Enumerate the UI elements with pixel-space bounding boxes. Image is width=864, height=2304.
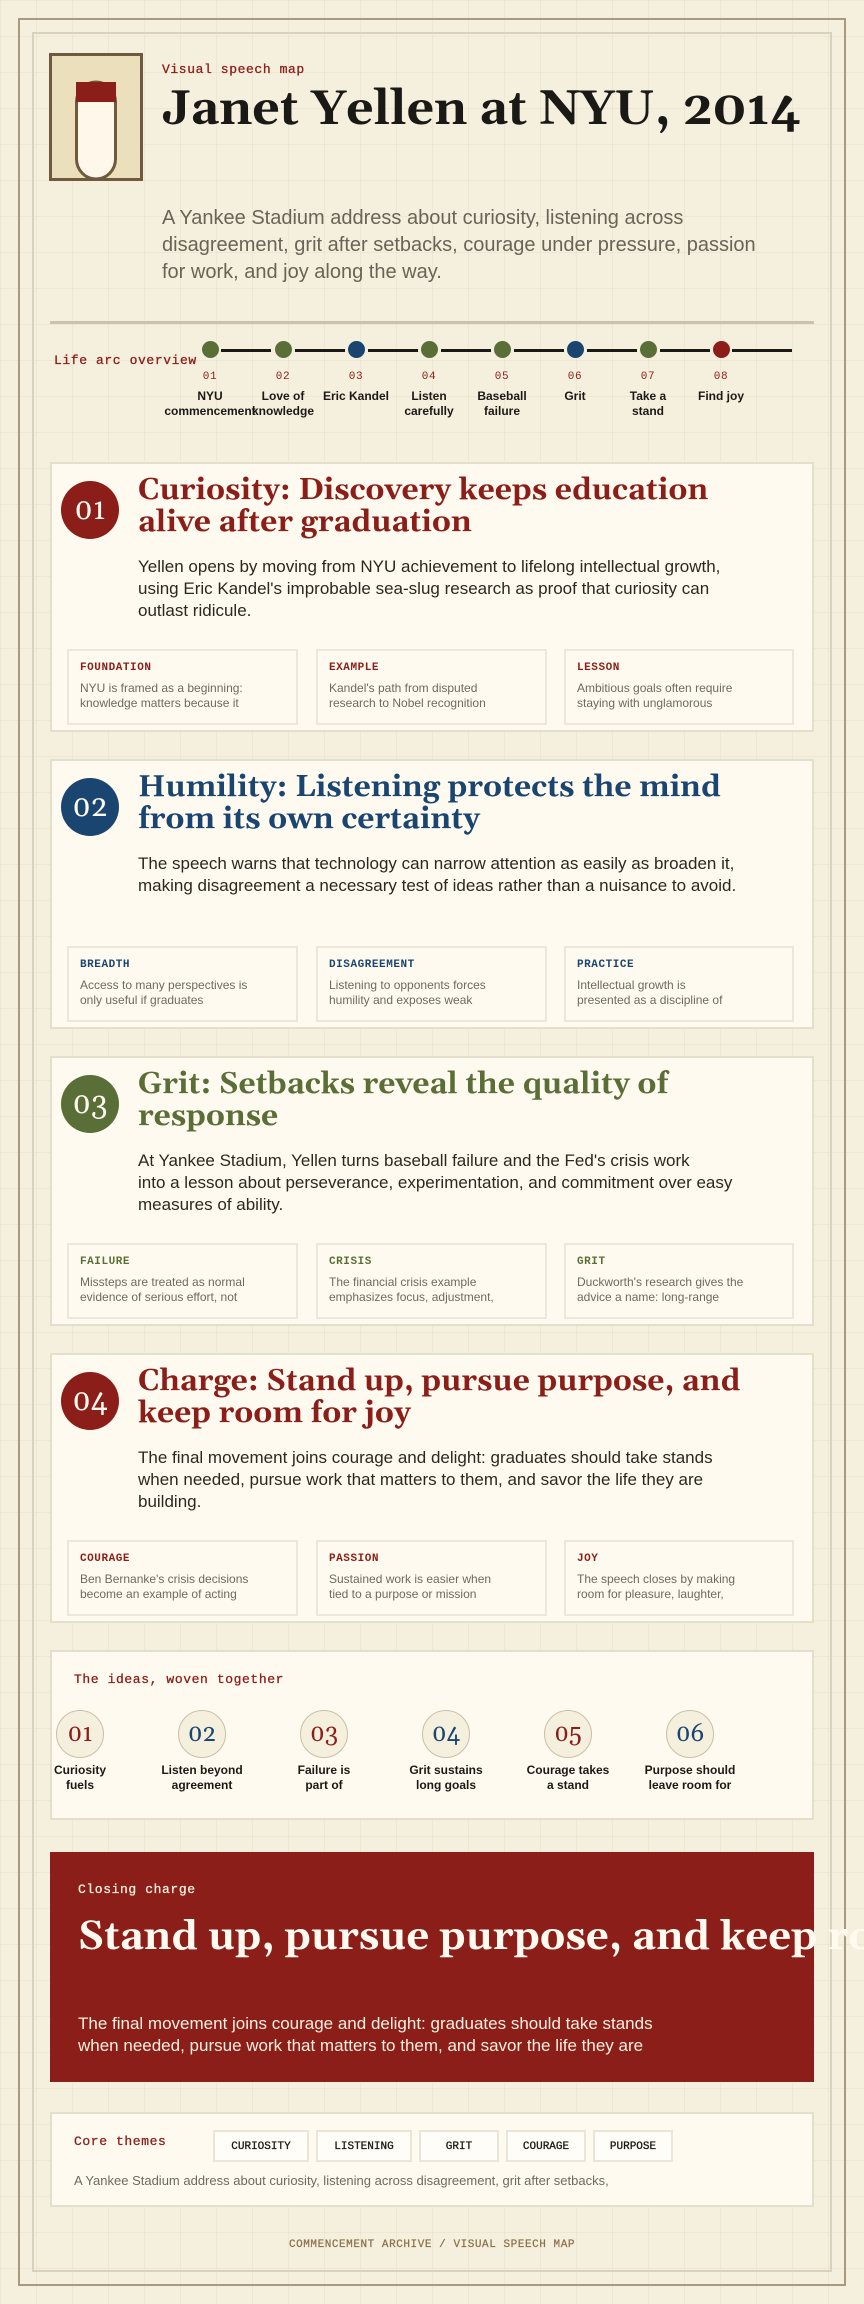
heading: Humility: Listening protects the mind: [138, 769, 721, 807]
card: passion: tied to a purpose or mission: [329, 1587, 476, 1601]
milestone 02: 02: [276, 371, 290, 383]
panel: curiosity: [50, 462, 814, 732]
subtitle: disagreement, grit after setbacks, courage under pressure, passion: [162, 234, 756, 256]
core themes label: Core themes: [74, 2134, 166, 2149]
idea 05: 05: [554, 1720, 582, 1750]
card: joy: [564, 1540, 794, 1616]
card: failure: Missteps are treated as normal: [80, 1275, 245, 1289]
card: passion: PASSION: [329, 1553, 379, 1565]
card: breadth: [67, 946, 298, 1022]
eyebrow: Visual speech map: [162, 62, 305, 77]
timeline label: Life arc overview: [54, 353, 197, 368]
card: lesson: Ambitious goals often require: [577, 681, 732, 695]
idea 02: agreement: [172, 1778, 232, 1792]
milestone 06: 06: [568, 371, 582, 383]
number badge 04: [61, 1372, 119, 1430]
card: disagreement: [316, 946, 547, 1022]
milestone 05: failure: [484, 404, 520, 418]
panel: charge: [50, 1353, 814, 1623]
body text: [138, 1448, 713, 1511]
milestone 08: 08: [714, 371, 728, 383]
card: disagreement: humility and exposes weak: [329, 993, 472, 1007]
card: courage: COURAGE: [80, 1553, 130, 1565]
idea 05: Courage takes: [527, 1762, 609, 1776]
card: passion: Sustained work is easier when: [329, 1572, 491, 1586]
idea 03: part of: [305, 1778, 343, 1792]
card: courage: [67, 1540, 298, 1616]
card: example: research to Nobel recognition: [329, 696, 486, 710]
subtitle: A Yankee Stadium address about curiosity, listening across: [162, 207, 683, 229]
milestone 01: 01: [203, 371, 217, 383]
heading: keep room for joy: [138, 1395, 411, 1433]
card: practice: Intellectual growth is: [577, 978, 686, 992]
chip: listening: LISTENING: [334, 2141, 394, 2153]
milestone 06: Grit: [564, 388, 586, 402]
heading: [138, 472, 708, 542]
body text: into a lesson about perseverance, experimentation, and commitment over easy: [138, 1173, 732, 1192]
milestone 07: Take a: [630, 388, 666, 402]
milestone 03: 03: [349, 371, 363, 383]
card: foundation: [67, 649, 298, 725]
chip: purpose: [593, 2130, 673, 2162]
card: lesson: LESSON: [577, 662, 620, 674]
body text: Yellen opens by moving from NYU achievement to lifelong intellectual growth,: [138, 557, 720, 576]
body text: The final movement joins courage and delight: graduates should take stands: [138, 1448, 713, 1467]
idea 04: 04: [432, 1720, 460, 1750]
milestone 04: carefully: [404, 404, 454, 418]
body text: building.: [138, 1492, 201, 1511]
card: lesson: [564, 649, 794, 725]
heading: Curiosity: Discovery keeps education: [138, 472, 708, 510]
number badge 01: 01: [74, 492, 106, 530]
milestone 02: knowledge: [252, 404, 314, 418]
idea 01: Curiosity: [54, 1762, 106, 1776]
panel: humility: [50, 759, 814, 1029]
milestone 01: NYU: [197, 388, 223, 402]
card: joy: The speech closes by making: [577, 1572, 735, 1586]
milestone 07: stand: [632, 404, 664, 418]
idea 03: [298, 1710, 350, 1792]
idea 02: 02: [188, 1720, 216, 1750]
idea 06: 06: [676, 1720, 704, 1750]
idea 03: 03: [310, 1720, 338, 1750]
milestone 01: [164, 341, 256, 418]
card: breadth: BREADTH: [80, 959, 130, 971]
idea 04: [409, 1710, 483, 1792]
milestone 07: 07: [641, 371, 655, 383]
milestone 08: Find joy: [698, 388, 744, 402]
chip: curiosity: CURIOSITY: [231, 2141, 291, 2153]
card: joy: room for pleasure, laughter,: [577, 1587, 724, 1601]
card: foundation: NYU is framed as a beginning:: [80, 681, 243, 695]
panel: grit: [50, 1056, 814, 1326]
milestone 07: [630, 341, 666, 418]
milestone 04: Listen: [411, 388, 447, 402]
closing body: The final movement joins courage and delight: graduates should take stands: [78, 2014, 653, 2033]
card: breadth: only useful if graduates: [80, 993, 203, 1007]
card: failure: FAILURE: [80, 1256, 130, 1268]
milestone 02: [252, 341, 314, 418]
idea 06: leave room for: [649, 1778, 731, 1792]
card: grit: advice a name: long-range: [577, 1290, 719, 1304]
card: crisis: CRISIS: [329, 1256, 372, 1268]
chip: grit: GRIT: [446, 2141, 472, 2153]
card: crisis: [316, 1243, 547, 1319]
card: passion: [316, 1540, 547, 1616]
heading: [138, 1066, 670, 1136]
heading: alive after graduation: [138, 504, 472, 542]
chip: courage: COURAGE: [523, 2141, 569, 2153]
idea 04: Grit sustains: [409, 1762, 483, 1776]
idea 06: [645, 1710, 735, 1792]
card: courage: Ben Bernanke's crisis decisions: [80, 1572, 248, 1586]
card: disagreement: Listening to opponents forces: [329, 978, 486, 992]
milestone 01: commencement: [164, 404, 256, 418]
number badge 03: 03: [73, 1086, 107, 1124]
card: foundation: knowledge matters because it: [80, 696, 239, 710]
body text: making disagreement a necessary test of ideas rather than a nuisance to avoid.: [138, 876, 736, 895]
idea 01: fuels: [66, 1778, 94, 1792]
card: crisis: emphasizes focus, adjustment,: [329, 1290, 494, 1304]
heading: from its own certainty: [138, 801, 480, 839]
idea 05: [527, 1710, 609, 1792]
chip: purpose: PURPOSE: [610, 2141, 656, 2153]
card: example: Kandel's path from disputed: [329, 681, 477, 695]
body text: outlast ridicule.: [138, 601, 251, 620]
closing body: when needed, pursue work that matters to them, and savor the life they are: [78, 2036, 643, 2055]
chip: listening: [316, 2130, 412, 2162]
body text: At Yankee Stadium, Yellen turns baseball failure and the Fed's crisis work: [138, 1151, 690, 1170]
card: example: EXAMPLE: [329, 662, 379, 674]
chip: curiosity: [213, 2130, 309, 2162]
card: breadth: Access to many perspectives is: [80, 978, 247, 992]
header rule: [50, 320, 814, 324]
title: Janet Yellen at NYU, 2014: [162, 80, 801, 141]
heading: [138, 1363, 740, 1433]
panel: closing charge: [50, 1852, 814, 2082]
closing body: [78, 2014, 653, 2055]
panel: core themes: [50, 2112, 814, 2207]
card: example: [316, 649, 547, 725]
number badge 04: 04: [72, 1383, 108, 1421]
heading: Grit: Setbacks reveal the quality of: [138, 1066, 668, 1104]
card: foundation: FOUNDATION: [80, 662, 152, 674]
milestone 03: Eric Kandel: [323, 388, 389, 402]
milestone 04: [404, 341, 454, 418]
card: practice: presented as a discipline of: [577, 993, 722, 1007]
card: disagreement: DISAGREEMENT: [329, 959, 415, 971]
milestone 06: [564, 341, 586, 402]
milestone 05: Baseball: [477, 388, 527, 402]
core themes summary: A Yankee Stadium address about curiosity, listening across disagreement, grit after setbacks,: [74, 2173, 609, 2188]
icon: portrait figure: [49, 53, 143, 181]
number badge 03: [61, 1075, 119, 1133]
idea 03: Failure is: [298, 1762, 350, 1776]
footer: COMMENCEMENT ARCHIVE / VISUAL SPEECH MAP: [289, 2239, 575, 2251]
heading: [138, 769, 721, 839]
body text: using Eric Kandel's improbable sea-slug research as proof that curiosity can: [138, 579, 709, 598]
idea 01: 01: [67, 1720, 93, 1750]
body text: [138, 557, 720, 620]
milestone 04: 04: [422, 371, 436, 383]
panel: ideas woven together: [50, 1650, 814, 1820]
body text: The speech warns that technology can narrow attention as easily as broaden it,: [138, 854, 734, 873]
body text: [138, 1151, 732, 1214]
idea 01: [54, 1710, 106, 1792]
ideas heading: The ideas, woven together: [74, 1672, 284, 1687]
card: crisis: The financial crisis example: [329, 1275, 476, 1289]
idea 02: [161, 1710, 243, 1792]
number badge 02: 02: [72, 789, 108, 827]
heading: response: [138, 1098, 278, 1136]
card: grit: Duckworth's research gives the: [577, 1275, 743, 1289]
card: failure: [67, 1243, 298, 1319]
idea 06: Purpose should: [645, 1762, 735, 1776]
timeline: life arc overview: [54, 341, 792, 418]
subtitle: [162, 207, 756, 283]
chip: courage: [506, 2130, 586, 2162]
idea 05: a stand: [547, 1778, 589, 1792]
card: courage: become an example of acting: [80, 1587, 237, 1601]
card: failure: evidence of serious effort, not: [80, 1290, 237, 1304]
idea 04: long goals: [416, 1778, 476, 1792]
milestone 08: [698, 341, 744, 402]
chip: grit: [419, 2130, 499, 2162]
heading: Charge: Stand up, pursue purpose, and: [138, 1363, 740, 1401]
card: grit: GRIT: [577, 1256, 606, 1268]
milestone 05: [477, 341, 527, 418]
body text: [138, 854, 736, 895]
number badge 01: [61, 481, 119, 539]
idea 02: Listen beyond: [161, 1762, 243, 1776]
milestone 03: [323, 341, 389, 402]
number badge 02: [61, 778, 119, 836]
milestone 02: Love of: [262, 388, 304, 402]
card: joy: JOY: [577, 1553, 598, 1565]
body text: when needed, pursue work that matters to them, and savor the life they are: [138, 1470, 703, 1489]
closing label: Closing charge: [78, 1882, 196, 1897]
card: practice: [564, 946, 794, 1022]
card: practice: PRACTICE: [577, 959, 634, 971]
card: grit: [564, 1243, 794, 1319]
milestone 05: 05: [495, 371, 509, 383]
body text: measures of ability.: [138, 1195, 283, 1214]
subtitle: for work, and joy along the way.: [162, 261, 442, 283]
card: lesson: staying with unglamorous: [577, 696, 712, 710]
